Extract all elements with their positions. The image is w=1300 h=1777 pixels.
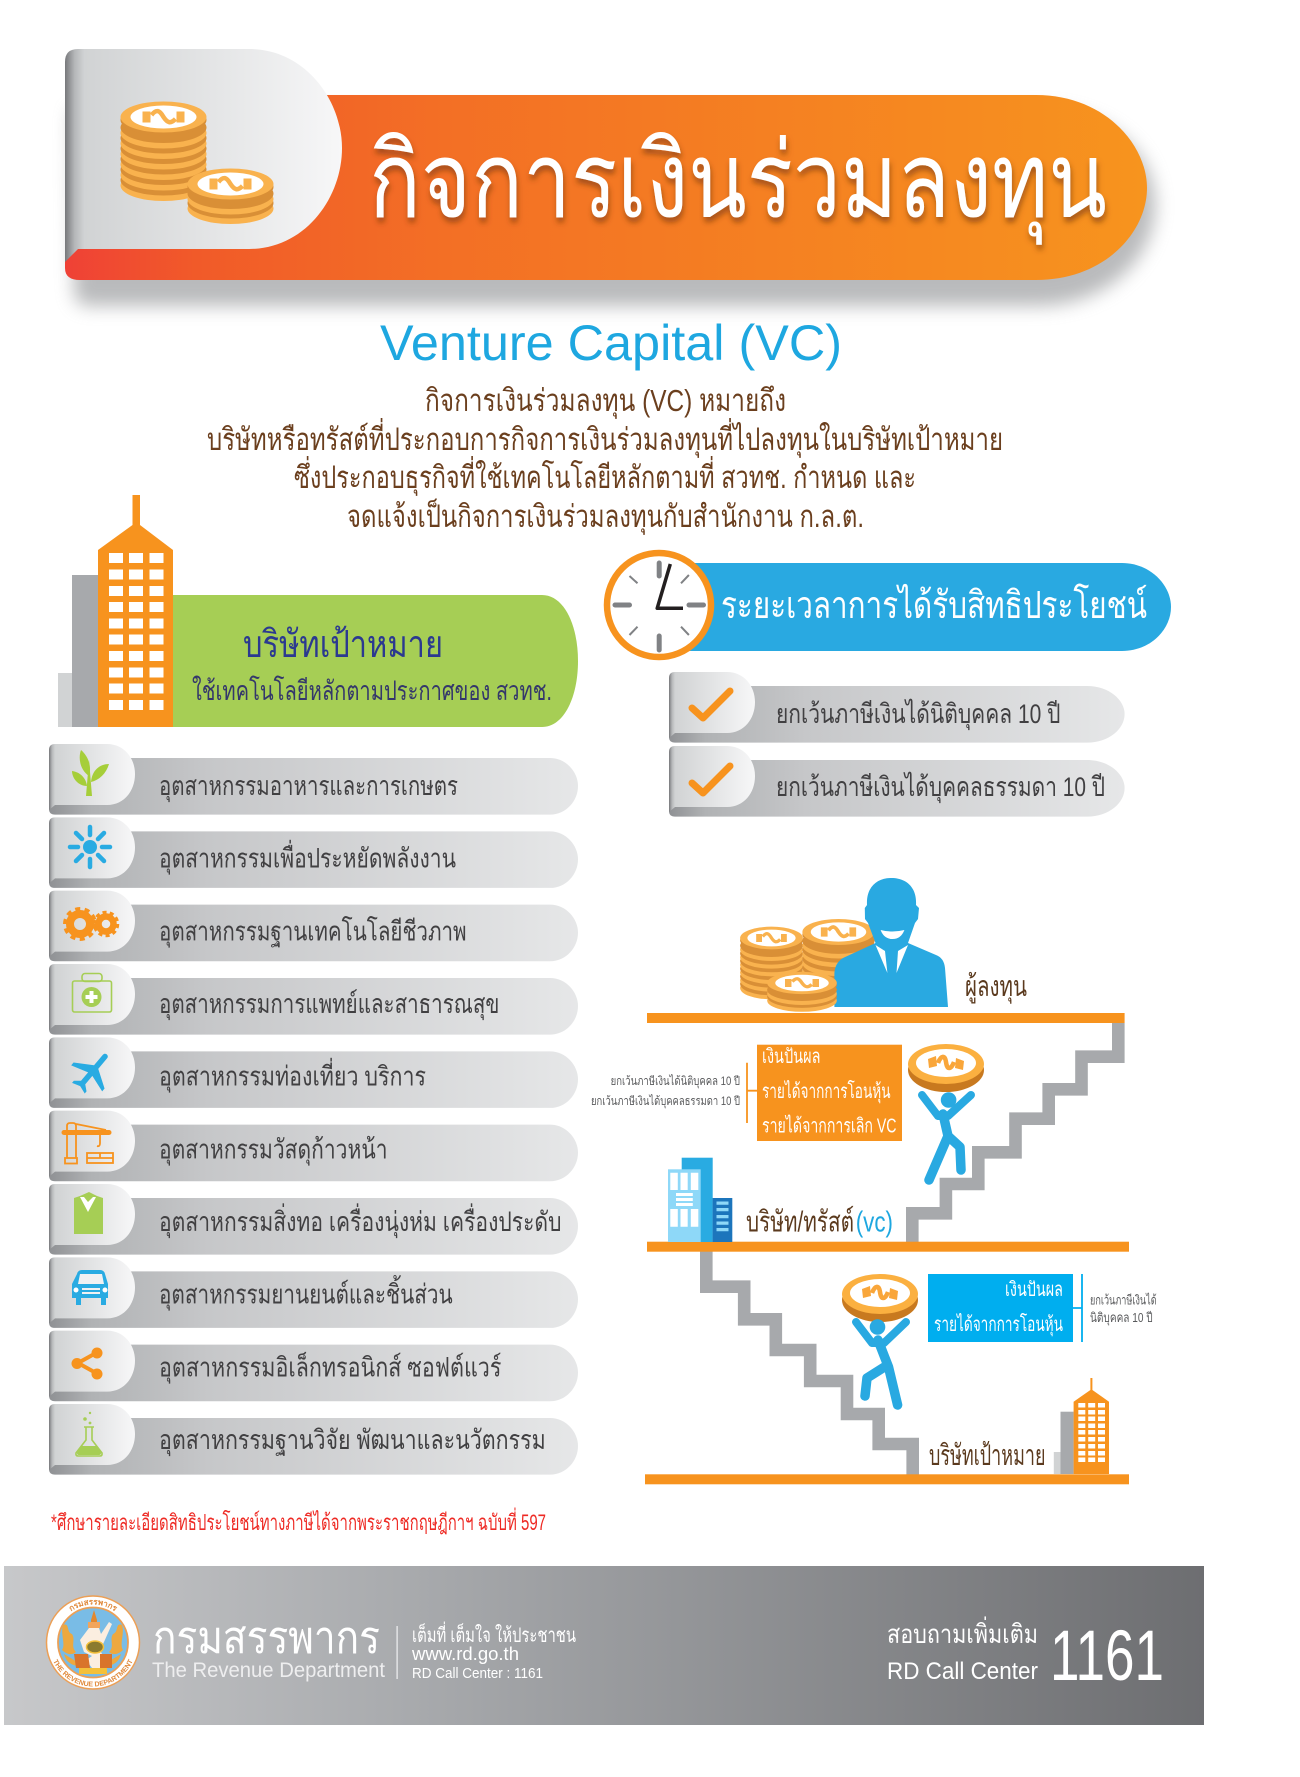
icon: sun [70,827,110,867]
label: target company: บริษัทเป้าหมาย [929,1440,1046,1472]
heading: main title: กิจการเงินร่วมลงทุน [369,122,1107,245]
text: slogan and contact [411,1621,576,1682]
row: automotive and parts: อุตสาหกรรมยานยนต์และชิ้นส่วน [159,1275,453,1312]
icon: small orange building [1054,1378,1109,1474]
row: research, development, innovation [49,1404,578,1475]
logo text: revenue department: กรมสรรพากร [153,1612,380,1663]
icon: revenue department emblem [46,1595,140,1690]
callout: target company returns [928,1274,1073,1342]
icon: check [692,766,730,793]
small text: exemptions from VC: ยกเว้นภาษีเงินได้บุคคลธรรมดา 10 ปี [591,1094,740,1109]
text: slogan and contact: เต็มที่ เต็มใจ ให้ประชาชน [412,1621,576,1647]
icon: VC building [668,1158,732,1242]
callout: target company returns: เงินปันผล [1005,1279,1063,1301]
text: slogan and contact: RD Call Center : 1161 [412,1665,543,1682]
definition text: ซึ่งประกอบธุรกิจที่ใช้เทคโนโลยีหลักตามที่ สวทช. กำหนด และ [294,456,916,497]
heading: target company: บริษัทเป้าหมาย [243,624,443,666]
floor: target company level [645,1474,1129,1484]
icon: coin stacks [740,919,875,1003]
icon: revenue department emblem: THE REVENUE DEPARTMENT [54,1658,132,1686]
row: electronics and software [49,1331,578,1401]
callout: VC returns: รายได้จากการโอนหุ้น [762,1080,891,1104]
callout: target company returns: รายได้จากการโอนหุ้น [934,1313,1063,1337]
row: textiles, apparel, accessories: อุตสาหกรรมสิ่งทอ เครื่องนุ่งห่ม เครื่องประดับ [159,1203,562,1239]
label: company / trust (VC): บริษัท/ทรัสต์ [746,1206,854,1239]
small text: exemption from target company: นิติบุคคล 10 ปี [1090,1310,1153,1326]
text: call center [887,1616,1164,1696]
panel: benefit personal income tax [669,746,1125,817]
icon: check [692,691,730,718]
row: automotive and parts [49,1257,578,1328]
icon: front coin stack [767,972,837,1012]
title banner [65,49,1155,306]
label: company / trust (VC): (vc) [856,1207,893,1239]
definition text: บริษัทหรือทรัสต์ที่ประกอบการกิจการเงินร่วมลงทุนที่ไปลงทุนในบริษัทเป้าหมาย [207,418,1003,459]
row: research, development, innovation: อุตสาหกรรมฐานวิจัย พัฒนาและนวัตกรรม [159,1425,546,1457]
icon: flask [76,1412,102,1456]
panel: industry list [49,744,578,1475]
stairs down [706,1251,913,1476]
callout: VC returns: รายได้จากการเลิก VC [762,1115,896,1138]
heading: benefit period: ระยะเวลาการได้รับสิทธิประโยชน์ [721,583,1147,627]
text: call center: สอบถามเพิ่มเติม [887,1616,1038,1649]
icon: header tab with coins [65,49,342,262]
icon: shirt [74,1192,103,1234]
subtitle: Venture Capital (VC) [380,315,842,371]
row: tourism and services: อุตสาหกรรมท่องเที่ยว บริการ [159,1058,426,1094]
icon: investor [834,878,948,1007]
footnote: *ศึกษารายละเอียดสิทธิประโยชน์ทางภาษีได้จากพระราชกฤษฎีกาฯ ฉบับที่ 597 [51,1507,546,1535]
floor: VC level [647,1242,1129,1252]
callout: VC returns [757,1045,902,1141]
icon: orange building [98,495,173,727]
icon: airplane [63,1041,122,1101]
small text: exemption from target company: ยกเว้นภาษีเงินได้ [1090,1292,1157,1307]
logo text: revenue department [152,1612,385,1682]
icon: medical bag [72,974,112,1012]
row: medical and public health: อุตสาหกรรมการแพทย์และสาธารณสุข [159,988,499,1021]
icon: clock [607,553,711,657]
row: advanced materials: อุตสาหกรรมวัสดุก้าวหน้า [159,1134,388,1166]
icon: share [72,1348,102,1380]
row: biotech: อุตสาหกรรมฐานเทคโนโลยีชีวภาพ [159,916,467,948]
text: call center: 1161 [1050,1617,1164,1696]
row: energy saving [49,817,578,888]
small text: exemptions from VC: ยกเว้นภาษีเงินได้นิติบุคคล 10 ปี [611,1074,740,1089]
stairs up [912,1023,1118,1244]
row: energy saving: อุตสาหกรรมเพื่อประหยัดพลังงาน [159,840,456,876]
icon: car [72,1270,108,1305]
row: tourism and services [49,1037,578,1108]
row: food and agriculture [49,744,578,815]
icon: revenue department emblem: กรมสรรพากร [70,1600,118,1612]
panel: benefit corporate income tax [669,672,1125,743]
panel: benefit personal income tax: ยกเว้นภาษีเงินได้บุคคลธรรมดา 10 ปี [776,772,1105,804]
definition text: จดแจ้งเป็นกิจการเงินร่วมลงทุนกับสำนักงาน ก.ล.ต. [347,498,864,536]
row: electronics and software: อุตสาหกรรมอิเล็กทรอนิกส์ ซอฟต์แวร์ [159,1349,501,1384]
text: target company note: ใช้เทคโนโลยีหลักตามประกาศของ สวทช. [192,675,552,706]
icon: person lifting coin up [908,1044,984,1180]
panel: target company header [58,495,578,727]
diagram: investment flow [591,878,1157,1484]
callout: VC returns: เงินปันผล [762,1046,820,1068]
row: textiles, apparel, accessories [49,1184,578,1255]
panel: benefit corporate income tax: ยกเว้นภาษีเงินได้นิติบุคคล 10 ปี [776,699,1060,731]
row: biotech [49,891,578,961]
panel: benefit period header [607,553,1171,657]
icon: plant [72,750,109,796]
panel: footer [4,1566,1204,1725]
definition text: กิจการเงินร่วมลงทุน (VC) หมายถึง [425,383,786,420]
row: food and agriculture: อุตสาหกรรมอาหารและการเกษตร [159,771,458,803]
text: call center: RD Call Center [887,1658,1038,1685]
text: slogan and contact: www.rd.go.th [411,1644,519,1664]
icon: gears [65,909,118,939]
definition text [207,383,1003,536]
row: medical and public health [49,964,578,1035]
small text: exemptions from VC [591,1063,757,1123]
row: advanced materials [49,1111,578,1181]
label: investor: ผู้ลงทุน [965,971,1027,1004]
icon: crane [64,1123,113,1164]
small text: exemption from target company [1073,1274,1157,1342]
logo text: revenue department: The Revenue Department [152,1659,385,1682]
floor: investor level [647,1013,1125,1023]
icon: person lifting coin down [842,1274,918,1405]
